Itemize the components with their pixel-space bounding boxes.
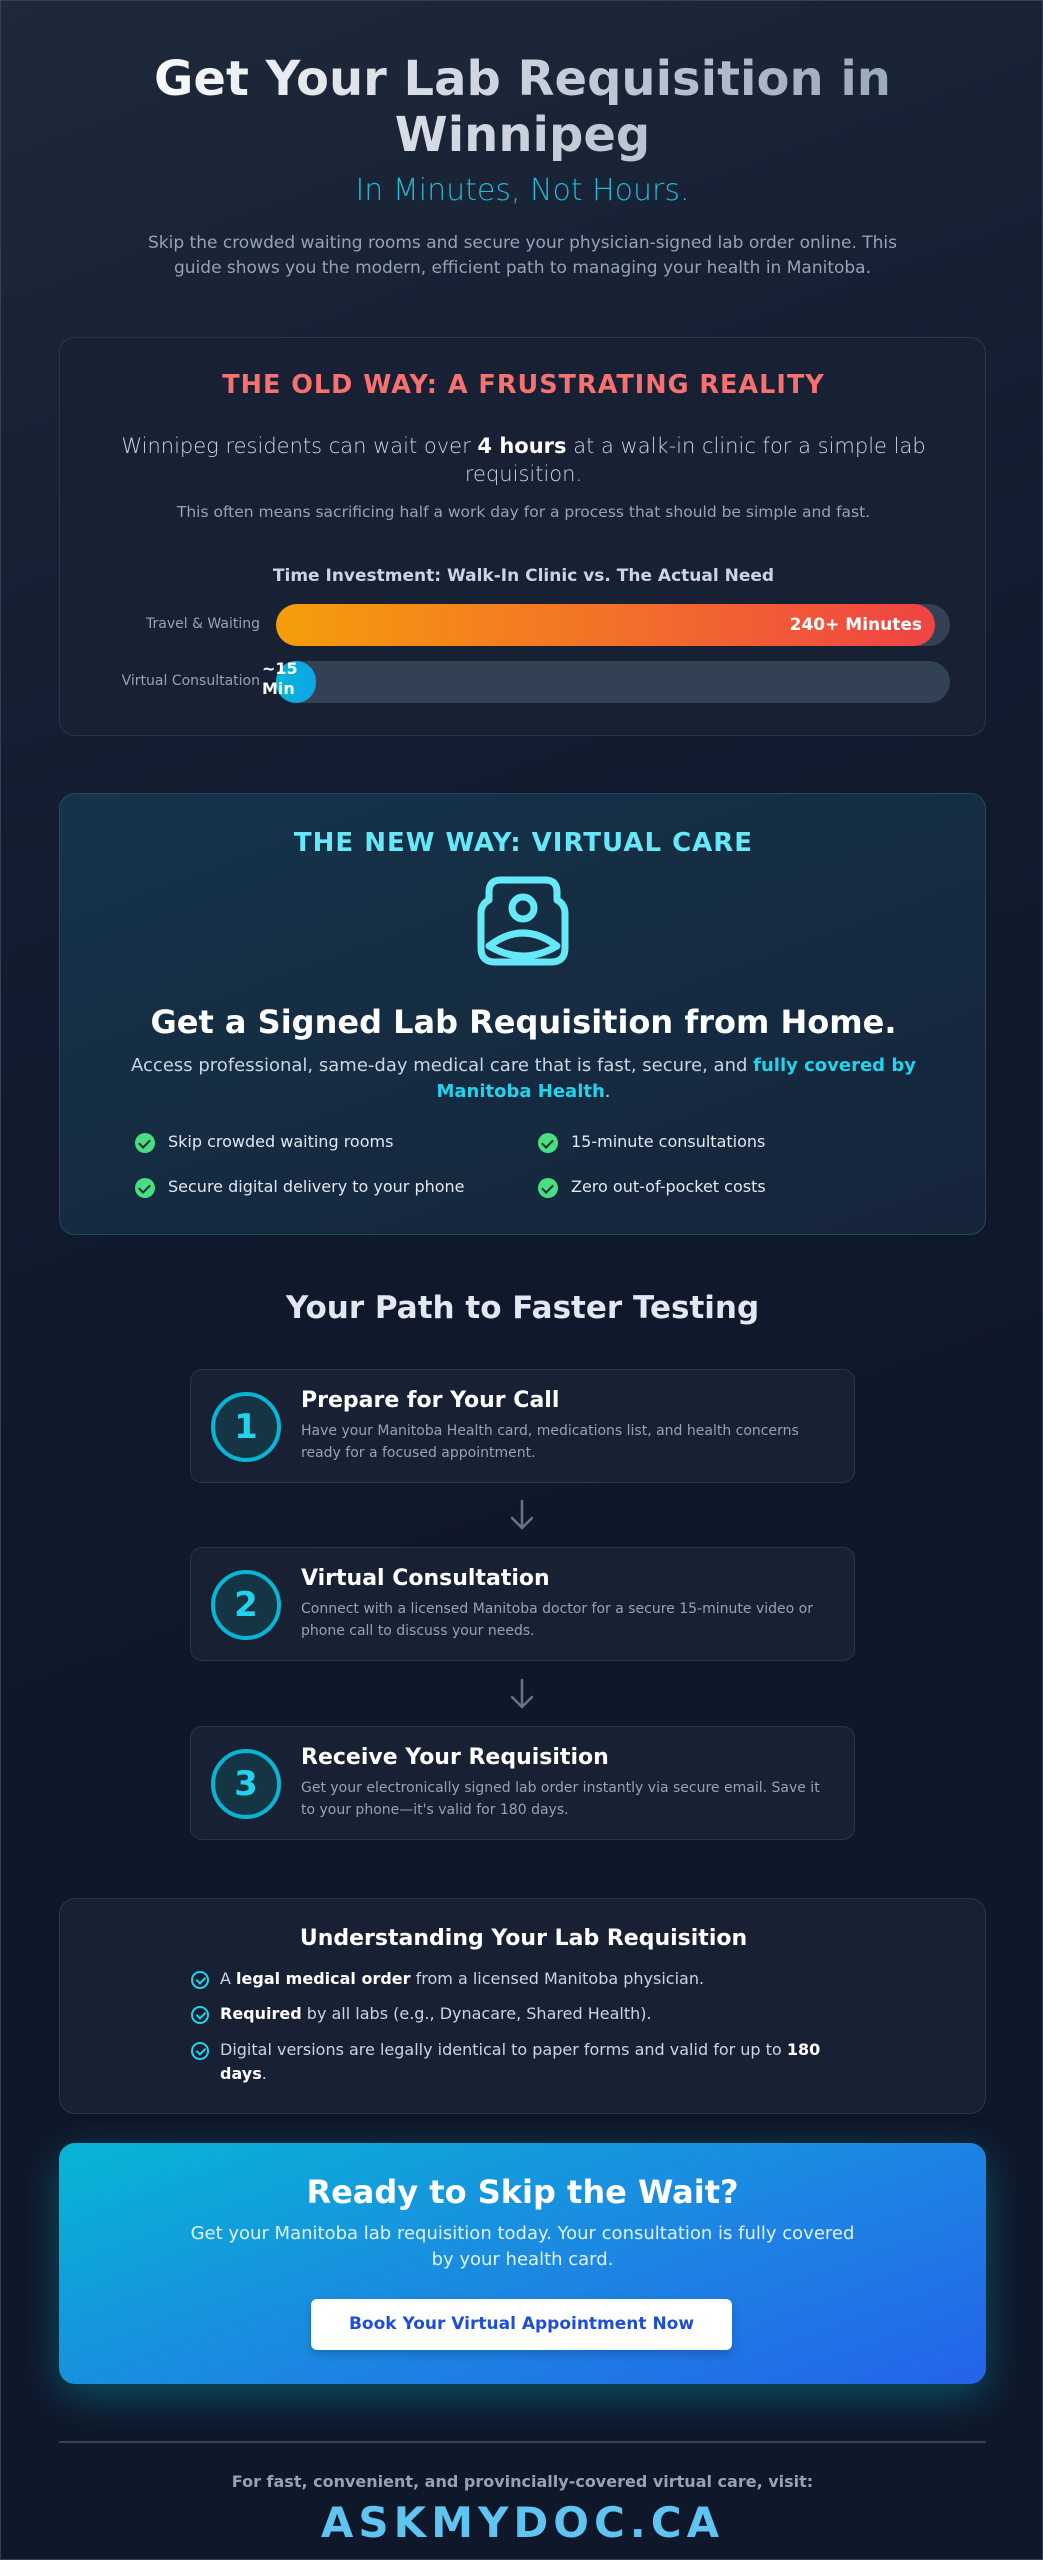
arrow 1	[510, 1500, 534, 1530]
benefits list: Secure digital delivery to your phone	[168, 1177, 465, 1196]
bar chart	[122, 566, 950, 703]
CTA panel	[59, 2143, 986, 2384]
chart title: Time Investment: Walk-In Clinic vs. The Actual Need	[273, 566, 774, 586]
panel: understanding	[59, 1898, 986, 2114]
CTA heading: Ready to Skip the Wait?	[306, 2173, 739, 2211]
heading: signed requisition: Get a Signed Lab Requisition from Home.	[151, 1003, 896, 1041]
CTA button: Book Your Virtual Appointment Now	[349, 2314, 694, 2334]
step 3: Get your electronically signed lab order instantly via secure email. Save it to your phone—it's valid for 180 days.	[301, 1780, 820, 1818]
bar: virtual consultation: Virtual Consultation	[122, 673, 260, 689]
benefits list: Skip crowded waiting rooms	[168, 1132, 393, 1151]
step 3	[190, 1726, 855, 1840]
icon: doctor video	[478, 876, 568, 966]
arrow 2	[510, 1678, 534, 1709]
CTA text: Get your Manitoba lab requisition today. Your consultation is fully covered by your health card.	[191, 2223, 854, 2270]
step 1: Prepare for Your Call	[301, 1388, 559, 1413]
text: access: Access professional, same-day medical care that is fast, secure, and fully covered by Manitoba Health.	[131, 1055, 916, 1102]
step 1: 1	[234, 1407, 258, 1447]
panel: new way	[59, 793, 986, 1235]
bar: virtual consultation: ~15 Min	[262, 659, 298, 698]
step 2: 2	[234, 1585, 258, 1625]
footer text: For fast, convenient, and provincially-covered virtual care, visit:	[232, 2472, 813, 2491]
list: requisition facts: A legal medical order from a licensed Manitoba physician.	[220, 1969, 704, 1988]
heading: path: Your Path to Faster Testing	[286, 1290, 759, 1326]
panel: old way	[59, 337, 986, 736]
title: Get Your Lab Requisition in Winnipeg	[154, 51, 891, 163]
heading: understanding: Understanding Your Lab Requisition	[300, 1926, 747, 1951]
heading: old way: THE OLD WAY: A FRUSTRATING REALITY	[222, 370, 825, 400]
text: 4 hours: Winnipeg residents can wait over 4 hours at a walk-in clinic for a simple lab requisition.	[121, 434, 926, 486]
bar: travel & waiting: Travel & Waiting	[146, 616, 260, 632]
bar: travel & waiting	[146, 604, 950, 646]
list: requisition facts: Digital versions are legally identical to paper forms and valid for up to 180 days.	[220, 2040, 820, 2083]
text: half day: This often means sacrificing half a work day for a process that should be simple and fast.	[177, 503, 870, 521]
benefits list: Zero out-of-pocket costs	[571, 1177, 766, 1196]
list: requisition facts: Required by all labs (e.g., Dynacare, Shared Health).	[220, 2004, 652, 2023]
bar: virtual consultation	[122, 659, 950, 703]
step 3: Receive Your Requisition	[301, 1745, 609, 1770]
step 2: Connect with a licensed Manitoba doctor for a secure 15-minute video or phone call to discuss your needs.	[301, 1601, 813, 1639]
benefits list: 15-minute consultations	[571, 1132, 765, 1151]
benefits list	[135, 1132, 766, 1198]
step 2: Virtual Consultation	[301, 1566, 550, 1591]
bar: travel & waiting: 240+ Minutes	[790, 615, 922, 635]
step 1	[190, 1369, 855, 1483]
heading: new way: THE NEW WAY: VIRTUAL CARE	[294, 828, 753, 858]
intro text: Skip the crowded waiting rooms and secure your physician-signed lab order online. This guide shows you the modern, efficient path to managing your health in Manitoba.	[148, 233, 897, 278]
list: requisition facts	[191, 1969, 820, 2083]
step 1: Have your Manitoba Health card, medications list, and health concerns ready for a focused appointment.	[301, 1423, 799, 1461]
footer brand: ASKMYDOC.CA	[321, 2498, 724, 2547]
step 3: 3	[234, 1764, 258, 1804]
step 2	[190, 1547, 855, 1661]
subtitle: In Minutes, Not Hours.	[355, 173, 690, 208]
CTA button	[311, 2299, 732, 2350]
